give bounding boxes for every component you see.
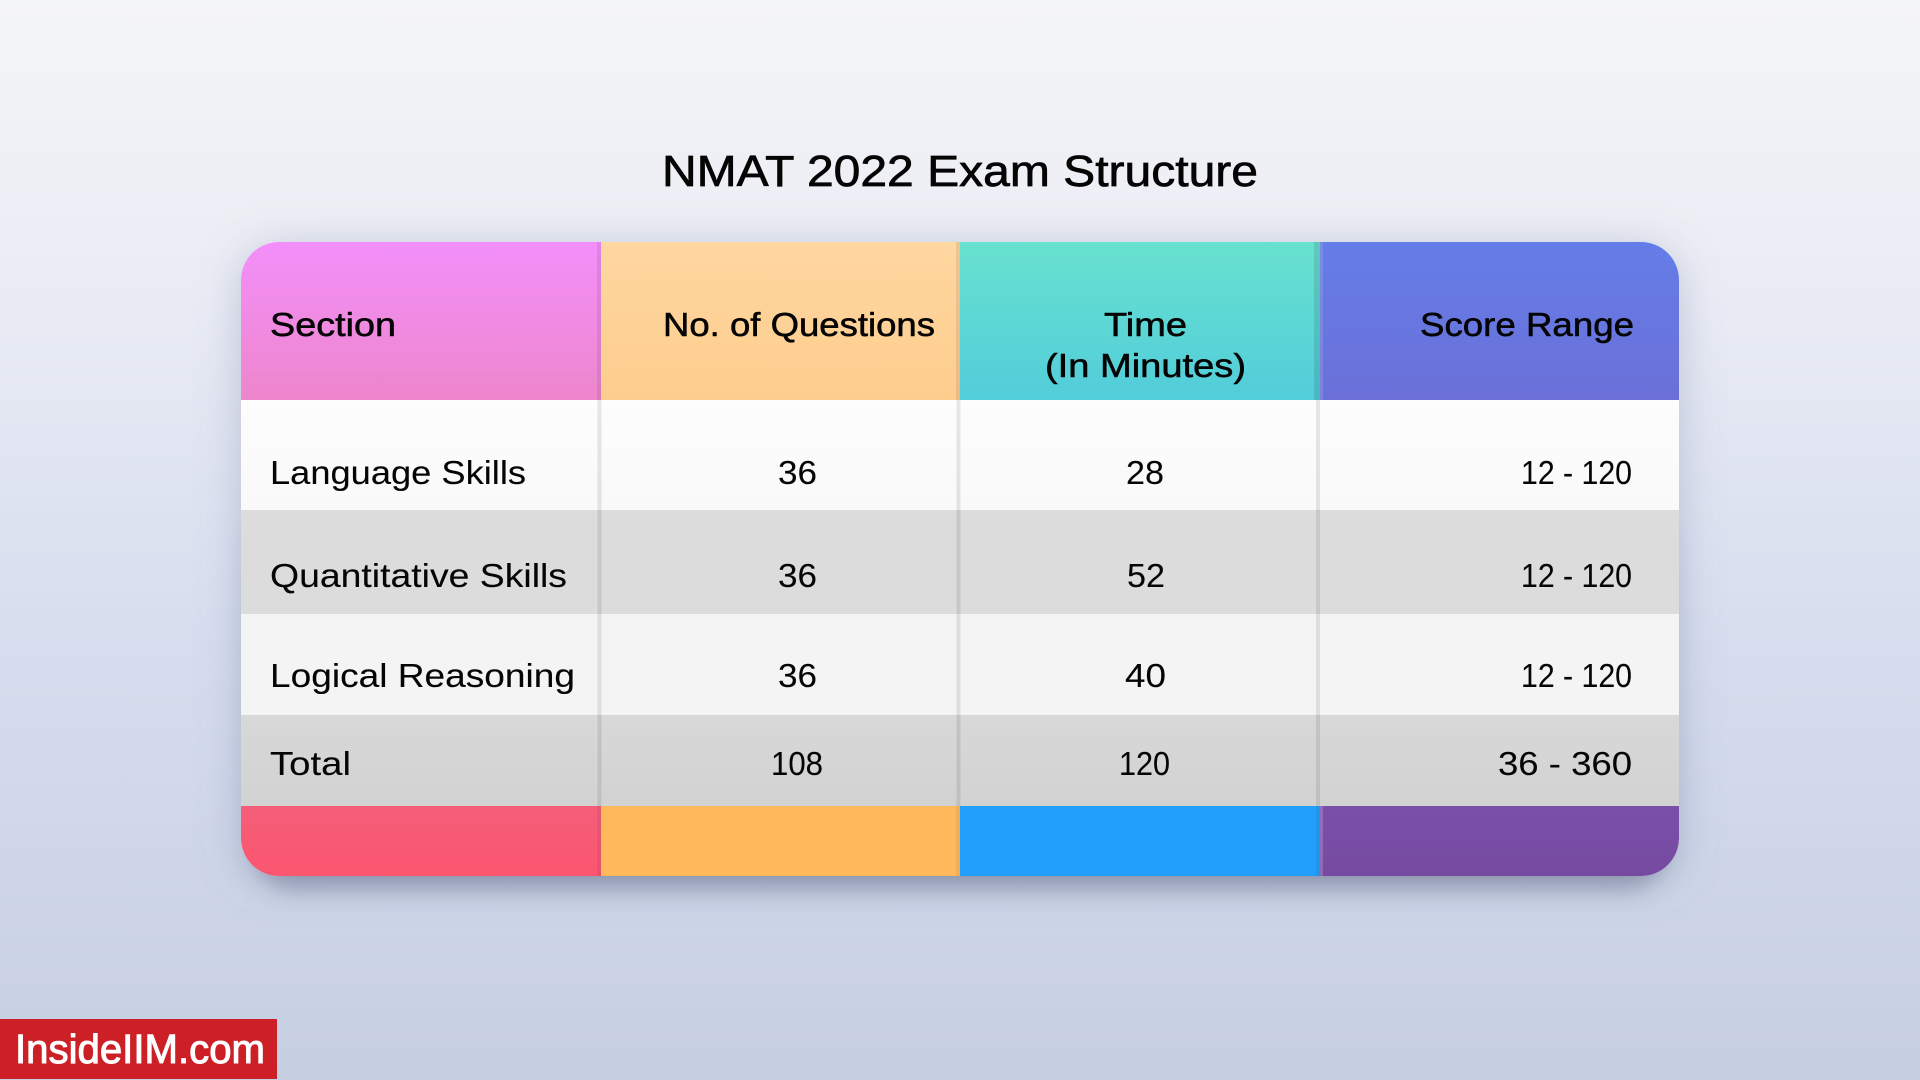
- row: Logical Reasoning: 40: [1125, 657, 1166, 694]
- table card shadow: [241, 242, 1679, 876]
- logo: InsideIIM.com: [0, 1019, 277, 1079]
- row: Language Skills: 28: [1126, 454, 1164, 491]
- header row fills: [241, 242, 1679, 400]
- row: Language Skills: Language Skills: [270, 454, 526, 491]
- row: Quantitative Skills: 36: [778, 557, 817, 594]
- body row fills: [241, 510, 1679, 806]
- column headings: [270, 306, 1634, 384]
- row: Total: 120: [1119, 745, 1170, 782]
- row: Quantitative Skills: 52: [1127, 557, 1165, 594]
- logo: InsideIIM.com: InsideIIM.com: [15, 1026, 265, 1072]
- row: Logical Reasoning: [270, 657, 1632, 694]
- title: NMAT 2022 Exam Structure: [662, 147, 1258, 196]
- column dividers: [597, 242, 1323, 876]
- column headings: No. of Questions: [663, 306, 935, 343]
- row: Quantitative Skills: [270, 557, 1632, 594]
- column headings: Score Range: [1420, 306, 1634, 343]
- row: Total: Total: [270, 745, 351, 782]
- footer band: [241, 806, 1679, 876]
- row: Total: 36 - 360: [1498, 745, 1632, 782]
- column headings: Section: [270, 306, 396, 343]
- row: Logical Reasoning: 12 - 120: [1521, 657, 1632, 694]
- row: Total: [270, 745, 1632, 782]
- row: Language Skills: 36: [778, 454, 817, 491]
- row: Logical Reasoning: 36: [778, 657, 817, 694]
- row: Quantitative Skills: Quantitative Skills: [270, 557, 567, 594]
- row: Language Skills: [270, 454, 1632, 491]
- table: [241, 242, 1679, 876]
- column headings: (In Minutes): [1045, 347, 1246, 384]
- row: Language Skills: 12 - 120: [1521, 454, 1632, 491]
- column headings: Time: [1104, 306, 1187, 343]
- row: Logical Reasoning: Logical Reasoning: [270, 657, 575, 694]
- row: Total: 108: [771, 745, 823, 782]
- row: Quantitative Skills: 12 - 120: [1521, 557, 1632, 594]
